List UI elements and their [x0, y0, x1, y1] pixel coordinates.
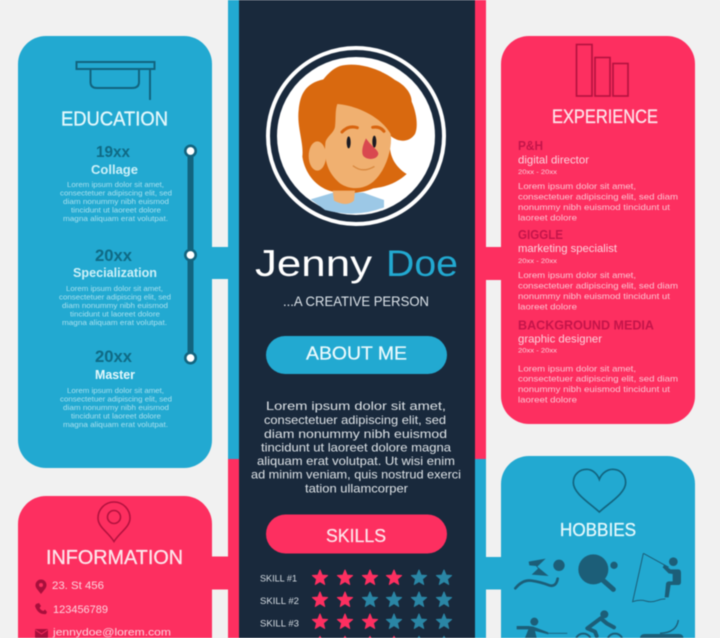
education entry 3: tincidunt ut laoreet dolore [71, 412, 161, 420]
panel: center column [239, 0, 475, 638]
education entry 3 [60, 347, 172, 429]
text block: about me: aliquam erat volutpat. Ut wisi enim [257, 454, 455, 468]
face [325, 104, 391, 188]
job 1: 20xx - 20xx [518, 169, 558, 176]
nose [362, 138, 378, 159]
job 1: consectetuer adipiscing elit, sed diam [518, 192, 678, 202]
icon: fencer [517, 618, 567, 638]
icon: location pin [98, 502, 130, 542]
hair [298, 65, 417, 193]
avatar portrait [268, 48, 444, 224]
text block: about me: Lorem ipsum dolor sit amet, [266, 399, 446, 413]
skill rating rows [260, 570, 452, 638]
icon: graduation cap [76, 62, 154, 100]
text block: about me: tation ullamcorper [305, 482, 408, 496]
education entry 3: 20xx [95, 347, 133, 366]
icon: bars [576, 44, 628, 96]
job 2 [518, 228, 678, 312]
job 1: P&H [518, 139, 543, 153]
education entry 3: magna aliquam erat volutpat. [63, 420, 168, 429]
heading: skills: SKILLS [326, 526, 386, 546]
icon: fishing [633, 553, 681, 602]
contact: phone: 123456789 [53, 604, 108, 616]
text block: about me: consectetuer adipiscing elit, sed [264, 413, 446, 427]
education entry 1: Collage [91, 162, 138, 177]
job 2: consectetuer adipiscing elit, sed diam [518, 280, 678, 290]
contact: phone [35, 603, 108, 616]
job 2: laoreet dolore [518, 302, 577, 312]
education entry 2: tincidunt ut laoreet dolore [70, 310, 160, 318]
skill 3: SKILL #3 [260, 618, 299, 630]
mouth [353, 166, 374, 170]
education entry 1: tincidunt ut laoreet dolore [71, 206, 161, 214]
job 3: BACKGROUND MEDIA [518, 318, 654, 332]
job 2: GIGGLE [518, 228, 563, 242]
education entry 1: 19xx [96, 144, 130, 161]
ear [309, 141, 326, 171]
panel: experience [479, 36, 695, 424]
education entry 1 [60, 144, 172, 223]
text block: about me: ad minim veniam, quis nostrud exerci [251, 468, 461, 482]
text block: about me [251, 399, 461, 496]
education entry 1: consectetuer adipiscing elit, sed [60, 188, 172, 198]
skill 1 [260, 570, 452, 584]
education entry 2: magna aliquam erat volutpat. [62, 318, 167, 327]
job 3 [518, 318, 678, 404]
heading: skills [266, 514, 447, 554]
skill 1: SKILL #1 [260, 574, 297, 584]
education entry 2: 20xx [95, 246, 133, 265]
education entry 3: diam nonummy nibh euismod [63, 403, 169, 412]
education entry 2: Specialization [73, 265, 157, 280]
panel: education [18, 36, 235, 468]
contact: address [36, 580, 104, 594]
education entry 1: Lorem ipsum dolor sit amet, [67, 180, 164, 189]
job 3: 20xx - 20xx [518, 348, 558, 354]
text block: about me: tincidunt ut laoreet dolore magna [261, 440, 451, 454]
education entry 3: consectetuer adipiscing elit, sed [60, 394, 172, 404]
text block: about me: diam nonummy nibh euismod [264, 427, 447, 441]
brows [342, 127, 357, 132]
icon: cyclist [576, 610, 622, 638]
panel: information [18, 496, 235, 638]
heading: information: INFORMATION [46, 547, 183, 569]
eyes [347, 136, 351, 148]
education entry 1: magna aliquam erat volutpat. [63, 214, 168, 223]
tagline: ...A CREATIVE PERSON [283, 293, 429, 309]
job 3: nonummy nibh euismod tincidunt ut [518, 384, 671, 394]
hobby icons [515, 469, 683, 638]
job 3: consectetuer adipiscing elit, sed diam [518, 374, 678, 384]
icon: swimmer [515, 559, 565, 588]
name: Jenny [255, 243, 373, 284]
job 1 [518, 139, 678, 222]
job 3: graphic designer [518, 334, 602, 346]
skill 4 star tips at the crop edge [318, 636, 446, 638]
icon: heart [573, 469, 626, 512]
neck [333, 191, 355, 204]
job 2: Lorem ipsum dolor sit amet, [518, 270, 636, 280]
education entry 2 [59, 246, 171, 327]
name accent: Doe [386, 243, 458, 284]
job 3: Lorem ipsum dolor sit amet, [518, 364, 636, 374]
job 2: 20xx - 20xx [518, 258, 558, 265]
skill 2 [260, 592, 452, 607]
education entry 2: diam nonummy nibh euismod [62, 301, 168, 310]
education entry 1: diam nonummy nibh euismod [63, 197, 169, 206]
job 2: marketing specialist [518, 243, 617, 255]
heading: education: EDUCATION [61, 108, 168, 130]
heading: experience: EXPERIENCE [552, 107, 658, 128]
skill 3 [260, 614, 452, 630]
skill 2: SKILL #2 [260, 596, 299, 607]
contact: address: 23. St 456 [52, 580, 104, 592]
icon: table tennis [578, 554, 618, 589]
job 1: nonummy nibh euismod tincidunt ut [518, 202, 671, 212]
job 1: digital director [518, 154, 589, 166]
job 3: laoreet dolore [518, 394, 577, 404]
education entry 2: consectetuer adipiscing elit, sed [59, 292, 171, 302]
job 1: laoreet dolore [518, 212, 577, 222]
heading: about me: ABOUT ME [306, 344, 407, 364]
job 1: Lorem ipsum dolor sit amet, [518, 181, 636, 191]
heading: hobbies: HOBBIES [560, 520, 636, 540]
panel: hobbies [479, 456, 695, 638]
icon: boat [640, 620, 683, 638]
timeline [185, 146, 196, 363]
education entry 2: Lorem ipsum dolor sit amet, [66, 284, 163, 293]
education entry 3: Master [95, 367, 135, 382]
heading: about me [266, 336, 447, 374]
shirt [311, 193, 384, 214]
job 2: nonummy nibh euismod tincidunt ut [518, 291, 671, 301]
education entry 3: Lorem ipsum dolor sit amet, [67, 386, 164, 395]
